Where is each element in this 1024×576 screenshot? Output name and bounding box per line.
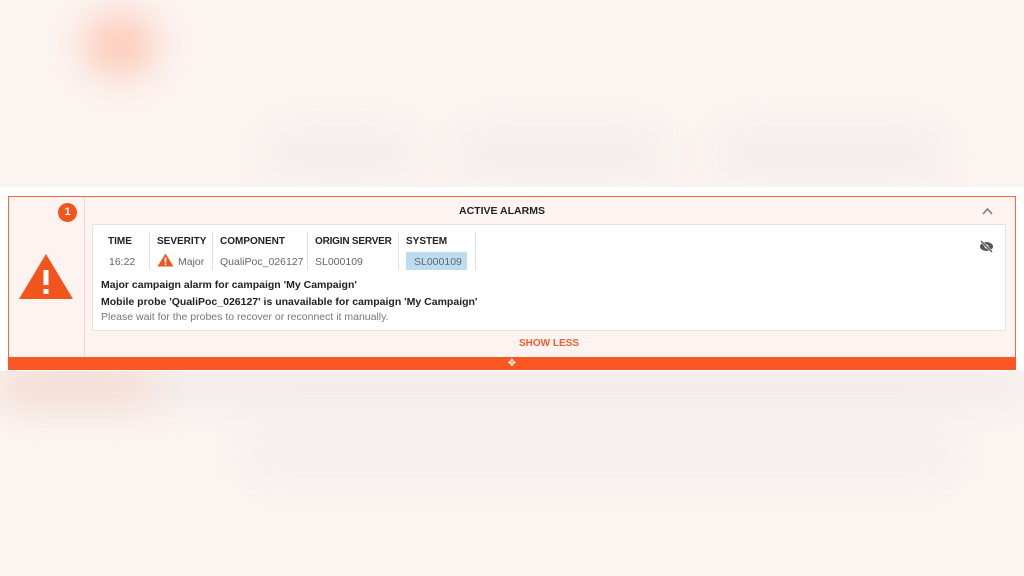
- badge: count: [58, 203, 77, 222]
- orange resize bar: ✥: [508, 358, 516, 369]
- panel: active alarms: [8, 196, 1016, 370]
- alarm message: [101, 279, 477, 323]
- icon: hidden eye: [980, 240, 993, 252]
- text: COMPONENT: [220, 236, 285, 247]
- text: Mobile probe 'QualiPoc_026127' is unavailable for campaign 'My Campaign': [101, 296, 477, 308]
- left cell divider: [84, 197, 85, 357]
- text: SL000109: [414, 256, 462, 268]
- text: QualiPoc_026127: [220, 256, 303, 268]
- orange resize bar: [8, 357, 1016, 370]
- table headers: [108, 236, 447, 247]
- table values: [109, 252, 467, 270]
- text: Major campaign alarm for campaign 'My Campaign': [101, 279, 357, 291]
- show less link: SHOW LESS: [519, 338, 579, 349]
- text: TIME: [108, 236, 132, 247]
- text: Please wait for the probes to recover or reconnect it manually.: [101, 311, 389, 323]
- white strip: [0, 187, 1024, 371]
- text: Major: [178, 256, 204, 268]
- text: 16:22: [109, 256, 135, 268]
- badge: count: 1: [64, 206, 71, 218]
- text: SEVERITY: [157, 236, 206, 247]
- icon: chevron up: [982, 208, 992, 214]
- text: ORIGIN SERVER: [315, 236, 392, 247]
- text: SL000109: [315, 256, 363, 268]
- icon: big warning: [19, 254, 73, 299]
- text: SYSTEM: [406, 236, 447, 247]
- alarm card: [92, 224, 1006, 331]
- heading: ACTIVE ALARMS: [459, 205, 545, 217]
